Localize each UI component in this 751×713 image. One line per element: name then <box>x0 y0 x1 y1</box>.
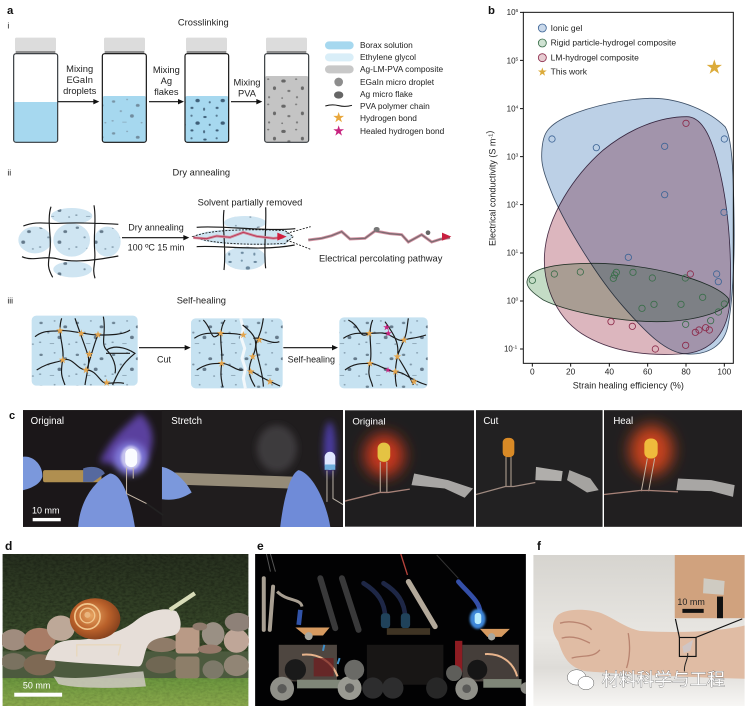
arrow with label: cut <box>139 345 191 365</box>
watermark text: 材料科学与工程 <box>602 669 725 689</box>
legend: Ag micro flake <box>360 89 413 99</box>
panel letter d: d <box>5 539 12 553</box>
section iii heading <box>7 295 226 306</box>
arrow with label: self-healing: Self-healing <box>288 355 335 365</box>
chart legend: This work <box>551 67 588 77</box>
arrow with label: dry annealing conditions: Dry annealing <box>128 223 184 233</box>
scale bar <box>14 681 62 697</box>
y axis title: ) <box>485 131 495 134</box>
x axis labels: 80 <box>681 367 691 377</box>
legend: PVA polymer chain <box>360 101 430 111</box>
ionic gel data points <box>549 136 727 285</box>
snail shell <box>70 598 120 639</box>
inset photo: 10 mm <box>677 597 705 607</box>
panel letter b: b <box>488 5 495 17</box>
rigid particle composite data points <box>529 269 727 327</box>
snail body <box>45 609 181 666</box>
section iii heading: iii <box>7 295 13 305</box>
robot arm with wires, left <box>264 554 302 630</box>
y axis labels: 10 <box>507 104 516 113</box>
legend: Ethylene glycol <box>360 52 416 62</box>
photo: cut LED off: Cut <box>483 416 499 427</box>
healed network <box>339 317 428 388</box>
section i heading <box>7 18 229 30</box>
chart legend <box>538 23 676 77</box>
photo: original orange LED <box>345 410 474 527</box>
watermark icon <box>567 670 594 690</box>
arrow with label: cut: Cut <box>157 355 171 365</box>
cut network <box>191 318 283 388</box>
LM-hydrogel composite data points <box>608 120 712 352</box>
vial 2: EGaIn droplets <box>102 38 146 142</box>
y axis labels: -1 <box>513 345 518 351</box>
panel letter a: a <box>7 5 14 17</box>
legend: Healed hydrogen bond <box>360 126 445 136</box>
panel c: LED demonstration photos <box>9 410 742 527</box>
arrow with label: mixing EGaIn droplets: droplets <box>63 86 97 96</box>
arrow with label: mixing EGaIn droplets: Mixing <box>66 64 93 74</box>
y axis labels: 10 <box>507 152 516 161</box>
y axis title: Electrical conductivity (S m <box>488 139 498 246</box>
section ii heading: ii <box>7 167 11 177</box>
original self-healing network <box>32 316 138 386</box>
sensor on wrist with wire <box>682 640 693 671</box>
photo: original blue LED and stretch: 10 mm <box>32 505 60 515</box>
water and foreground grass <box>3 651 248 706</box>
arrow with label: self-healing <box>283 345 338 365</box>
section i heading: Crosslinking <box>178 18 229 28</box>
fist shading <box>560 622 630 668</box>
arrow with label: mixing Ag flakes: flakes <box>154 87 179 97</box>
x axis labels: 0 <box>530 367 535 377</box>
plot frame and ticks <box>520 12 733 367</box>
heading: solvent partially removed: Solvent partially removed <box>198 198 302 208</box>
panel b: conductivity vs healing efficiency chart <box>485 5 734 391</box>
y axis labels: 10 <box>507 56 516 65</box>
snail antenna <box>170 593 195 610</box>
photo: healed LED on: Heal <box>613 416 633 427</box>
photo: original orange LED: Original <box>352 416 385 427</box>
robot car, left <box>270 628 364 701</box>
arrow with label: mixing PVA <box>231 78 262 104</box>
x axis title: Strain healing efficiency (%) <box>573 381 684 391</box>
y axis labels: 0 <box>516 297 519 303</box>
photo: healed LED on <box>604 410 742 527</box>
robot car, right <box>446 629 533 700</box>
arrow with label: mixing EGaIn droplets: EGaIn <box>66 75 93 85</box>
annealed hydrogel network <box>193 207 295 270</box>
x axis labels: 40 <box>605 367 614 377</box>
section ii heading: Dry annealing <box>173 168 230 178</box>
panel letter f: f <box>537 539 542 553</box>
photo: original blue LED and stretch: Original <box>31 416 64 427</box>
y axis labels: 6 <box>516 8 519 14</box>
snail body reflection <box>53 671 146 688</box>
legend: Borax solution <box>360 40 413 50</box>
legend: EGaIn micro droplet <box>360 77 435 87</box>
lit blue LED arm, right <box>437 555 486 629</box>
chart legend: Rigid particle-hydrogel composite <box>551 38 676 48</box>
chart legend: LM-hydrogel composite <box>551 53 639 63</box>
electrical percolating pathway <box>308 227 451 242</box>
panel letter c: c <box>9 410 15 422</box>
y axis labels: 3 <box>516 152 519 158</box>
stones <box>0 613 251 654</box>
y axis labels: 10 <box>507 200 516 209</box>
arrow with label: mixing Ag flakes: Mixing <box>153 65 180 75</box>
x axis labels <box>530 367 732 377</box>
forearm and fist <box>553 610 745 679</box>
y axis labels: 2 <box>516 200 519 206</box>
x axis labels: 60 <box>643 367 653 377</box>
panel a: synthesis schematic <box>7 5 451 388</box>
vial 1: borax solution <box>14 38 58 142</box>
embedded circuit wire <box>77 645 121 656</box>
plot regions <box>527 98 734 354</box>
section iii heading: Self-healing <box>177 296 226 306</box>
arrow with label: dry annealing conditions <box>122 223 189 253</box>
legend: Ag-LM-PVA composite <box>360 64 444 74</box>
arrow with label: mixing Ag flakes: Ag <box>161 76 172 86</box>
y axis labels <box>504 8 519 354</box>
y axis labels: 5 <box>516 56 519 62</box>
panel f: wearable sensor on wrist photo <box>533 539 745 706</box>
photo: original blue LED and stretch <box>23 410 343 527</box>
dark grass backdrop <box>3 554 248 654</box>
y axis labels: 10 <box>507 8 516 17</box>
section ii and iii schematics <box>7 198 451 388</box>
robot arm, middle <box>401 554 435 627</box>
label: electrical percolating pathway: Electrical percolating pathway <box>319 254 443 264</box>
arrow with label: mixing Ag flakes <box>149 65 184 104</box>
chart legend: Ionic gel <box>551 23 582 33</box>
panel d: snail soft robot photo <box>0 539 251 706</box>
arrow with label: mixing PVA: PVA <box>238 89 257 99</box>
y axis labels: 1 <box>516 249 519 255</box>
faded ghost robots <box>320 578 447 699</box>
vial 3: EGaIn and Ag flakes <box>185 38 229 142</box>
x axis labels: 100 <box>717 367 732 377</box>
x axis labels: 20 <box>566 367 576 377</box>
zoom lines and selection box <box>675 619 742 656</box>
this work star marker <box>707 59 722 74</box>
hydrogel network before annealing <box>18 205 121 278</box>
y axis labels: 10 <box>504 345 513 354</box>
dashed zoom lines <box>287 227 311 249</box>
photo: cut LED off <box>476 410 603 527</box>
arrow with label: mixing PVA: Mixing <box>234 78 260 88</box>
photo: original blue LED and stretch: Stretch <box>171 416 202 427</box>
scale bar: 50 mm <box>23 681 50 691</box>
section i heading: i <box>7 20 9 30</box>
legend: Hydrogen bond <box>360 113 417 123</box>
y axis labels: 10 <box>507 297 516 306</box>
y axis labels: 4 <box>516 104 519 110</box>
arrow with label: dry annealing conditions: 100 ºC 15 min <box>128 243 184 253</box>
arrow with label: mixing EGaIn droplets <box>58 64 99 104</box>
y axis title: -1 <box>489 134 495 139</box>
stone reflections <box>1 653 249 679</box>
panel letter e: e <box>257 539 264 553</box>
inset photo <box>675 555 745 618</box>
y axis labels: 10 <box>507 249 516 258</box>
panel e: robot car photo sequence <box>255 539 533 706</box>
vial 4: Ag-LM-PVA composite <box>265 38 309 142</box>
legend <box>325 40 445 136</box>
section ii heading <box>7 167 230 178</box>
